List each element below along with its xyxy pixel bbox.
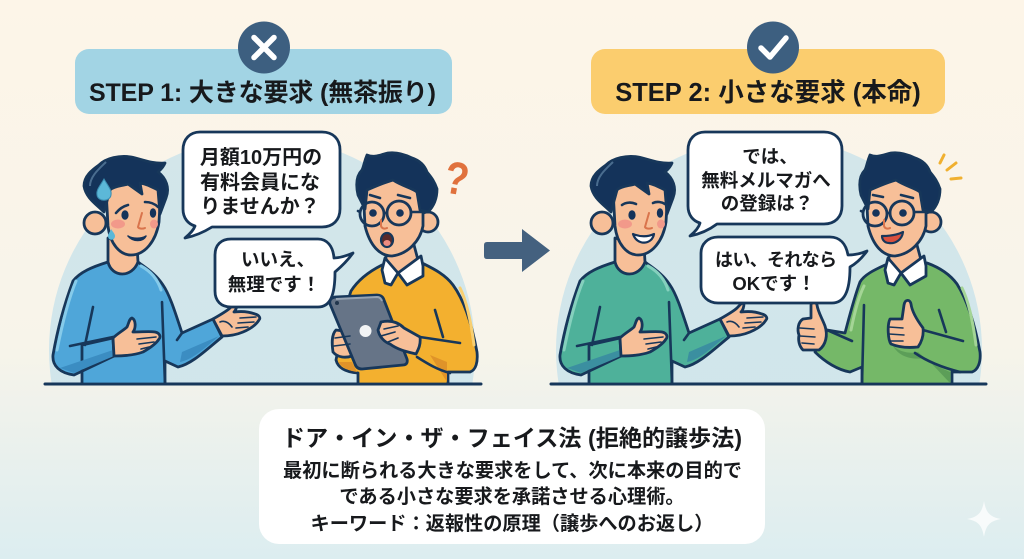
bubble text: smaller request: の登録は？: [721, 193, 813, 214]
backdrop circle: step 1: [49, 152, 474, 382]
explanation body: である小さな要求を承諾させる心理術。: [339, 485, 685, 508]
heading: step 1: [75, 22, 452, 114]
bubble text: acceptance: OKです！: [732, 273, 816, 294]
icon: left thumbs-up hand: [798, 302, 826, 350]
speech bubble: refusal: [215, 239, 353, 307]
bubble text: request: りませんか？: [200, 195, 320, 218]
panel: explanation: [259, 409, 765, 544]
person: smiling man in teal sweater: [560, 156, 767, 384]
icon: right thumbs-up hand: [888, 300, 923, 347]
bubble text: acceptance: [715, 250, 837, 294]
icon: tablet: [330, 295, 407, 369]
person: worried man in blue sweater: [53, 156, 260, 384]
explanation body: 最初に断られる大きな要求をして、次に本来の目的で: [283, 459, 742, 482]
ground line: step 1: [45, 382, 481, 386]
person: happy man in green sweater with thumbs up: [798, 153, 980, 384]
explanation body: [283, 459, 742, 535]
icon: sparkle lines: [940, 155, 961, 179]
icon: glasses: [861, 201, 926, 226]
speech bubble: request: [183, 132, 340, 238]
bubble text: smaller request: [701, 146, 831, 214]
bubble text: refusal: 無理です！: [228, 274, 320, 295]
icon: sweat drops: [97, 179, 115, 240]
bubble text: request: 有料会員にな: [200, 171, 320, 194]
step 2 title text: STEP 2: 小さな要求 (本命): [615, 79, 921, 107]
icon: check badge: [747, 22, 799, 74]
bubble text: refusal: いいえ、: [241, 249, 315, 270]
panel: step 1 scene: [44, 130, 482, 386]
bubble text: acceptance: はい、それなら: [715, 250, 837, 270]
panel: step 2 scene: [550, 130, 988, 386]
arrow: step 1 to step 2: [484, 229, 550, 272]
bubble text: refusal: [228, 249, 320, 295]
icon: question mark: ?: [440, 152, 473, 207]
bubble text: smaller request: では、: [742, 146, 798, 167]
speech bubble: smaller request: [688, 132, 842, 236]
icon: cross badge: [238, 22, 290, 74]
heading: step 2: [591, 22, 945, 114]
person: surprised man in yellow sweater with tablet: [330, 152, 477, 384]
ground line: step 2: [551, 382, 986, 386]
speech bubble: acceptance: [701, 237, 867, 303]
bubble text: smaller request: 無料メルマガへ: [701, 170, 831, 191]
bubble text: request: [200, 146, 322, 218]
step 1 title text: STEP 1: 大きな要求 (無茶振り): [89, 79, 436, 107]
icon: glasses: [358, 201, 423, 226]
icon: sparkle watermark: [967, 501, 1001, 537]
bubble text: request: 月額10万円の: [200, 146, 322, 169]
backdrop circle: step 2: [556, 150, 982, 382]
explanation title: ドア・イン・ザ・フェイス法 (拒絶的譲歩法): [282, 425, 742, 451]
explanation body: キーワード：返報性の原理（譲歩へのお返し）: [311, 513, 713, 535]
